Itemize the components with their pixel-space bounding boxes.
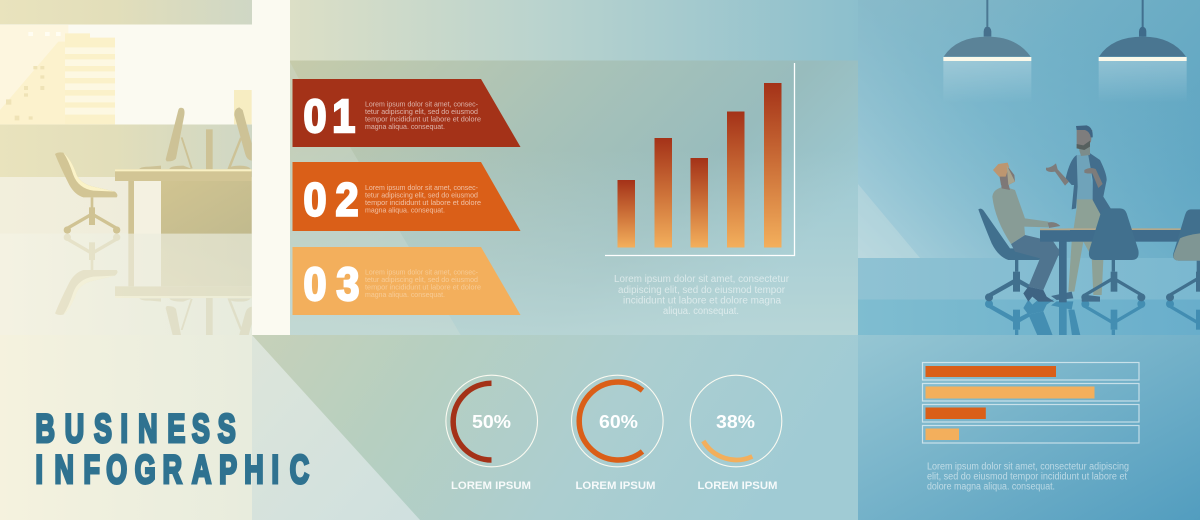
office chair right bbox=[1166, 209, 1200, 301]
illustration: window with city buildings bbox=[0, 25, 252, 124]
office chair center bbox=[1081, 208, 1145, 301]
bars caption bbox=[927, 462, 1129, 492]
chart caption: aliqua. consequat. bbox=[663, 306, 739, 317]
donut 60%: 60% bbox=[599, 412, 638, 432]
keyboard bbox=[139, 166, 161, 169]
panel: middle chart zone bbox=[290, 60, 858, 336]
ribbon 01 bbox=[292, 79, 520, 147]
donut 38% bbox=[690, 375, 782, 492]
title: INFOGRAPHIC bbox=[36, 448, 309, 492]
ribbon 01: tetur adipiscing elit, sed do eiusmod bbox=[365, 107, 478, 116]
floor reflection of office furniture bbox=[55, 234, 252, 360]
meeting table bbox=[1067, 228, 1200, 242]
table leg bbox=[1059, 241, 1067, 302]
ribbon 03: 03 bbox=[304, 259, 359, 311]
ribbon 03: Lorem ipsum dolor sit amet, consec- bbox=[365, 268, 479, 276]
chart caption: Lorem ipsum dolor sit amet, consectetur bbox=[614, 274, 790, 285]
ribbon 02 bbox=[292, 162, 520, 231]
monitor left bbox=[166, 108, 193, 169]
panel: bottom left bbox=[0, 335, 252, 520]
office chair bbox=[55, 152, 120, 234]
donut 38%: 38% bbox=[716, 412, 755, 432]
bars caption: Lorem ipsum dolor sit amet, consectetur adipiscing bbox=[927, 462, 1129, 472]
panel: middle top band bbox=[290, 0, 858, 60]
bars caption: dolore magna aliqua. consequat. bbox=[927, 482, 1055, 492]
illustration: ceiling lamps bbox=[943, 0, 1187, 103]
panel: bottom middle bbox=[252, 335, 858, 520]
illustration: office desk, monitors and chair bbox=[55, 107, 252, 360]
illustration: two men at meeting table bbox=[978, 125, 1111, 302]
lamp left bbox=[943, 0, 1031, 103]
donut 60% bbox=[572, 375, 663, 492]
desk bbox=[115, 169, 252, 234]
standing man bbox=[1046, 125, 1111, 302]
panel: right top scene background bbox=[858, 0, 1200, 335]
ribbon 02: 02 bbox=[304, 175, 358, 226]
ribbon 01: Lorem ipsum dolor sit amet, consec- bbox=[365, 100, 479, 108]
ribbon 02: tetur adipiscing elit, sed do eiusmod bbox=[365, 190, 478, 200]
office chair left bbox=[978, 209, 1062, 301]
ribbon 03: tetur adipiscing elit, sed do eiusmod bbox=[365, 275, 478, 284]
chart caption bbox=[614, 274, 790, 317]
panel: right bottom bbox=[858, 335, 1200, 520]
desk divider bbox=[206, 129, 213, 169]
seated man bbox=[992, 163, 1060, 302]
ribbon 01: tempor incididunt ut labore et dolore bbox=[365, 114, 481, 124]
bar chart bbox=[605, 63, 794, 256]
donut 50% bbox=[446, 375, 538, 492]
pillar bbox=[252, 0, 290, 335]
illustration: meeting table and front chairs bbox=[1067, 208, 1200, 301]
lamp right bbox=[1099, 0, 1187, 103]
title: BUSINESS bbox=[36, 407, 236, 451]
ribbon 02: tempor incididunt ut labore et dolore bbox=[365, 198, 481, 207]
ribbon 03: magna aliqua. consequat. bbox=[365, 290, 445, 299]
chart caption: adipiscing elit, sed do eiusmod tempor bbox=[618, 285, 786, 296]
chart caption: incididunt ut labore et dolore magna bbox=[623, 296, 782, 306]
ribbon 02: magna aliqua. consequat. bbox=[365, 206, 445, 214]
ribbon 01: magna aliqua. consequat. bbox=[365, 122, 445, 131]
panel: office scene background bbox=[0, 0, 252, 335]
horizontal progress bars bbox=[922, 362, 1139, 443]
title bbox=[36, 407, 309, 492]
donut 50%: 50% bbox=[472, 412, 511, 432]
ribbon 01: 01 bbox=[304, 91, 355, 143]
donut 50%: LOREM IPSUM bbox=[451, 480, 531, 492]
bars caption: elit, sed do eiusmod tempor incididunt ut labore et bbox=[927, 472, 1127, 482]
monitor right bbox=[227, 107, 252, 169]
illustration: meeting reflection on floor bbox=[985, 300, 1200, 335]
ribbon 02: Lorem ipsum dolor sit amet, consec- bbox=[365, 183, 479, 192]
donut 60%: LOREM IPSUM bbox=[576, 480, 656, 492]
ribbon 03: tempor incididunt ut labore et dolore bbox=[365, 282, 481, 292]
donut 38%: LOREM IPSUM bbox=[698, 480, 778, 492]
table top left section bbox=[1040, 228, 1070, 242]
ribbon 03 bbox=[292, 247, 520, 315]
